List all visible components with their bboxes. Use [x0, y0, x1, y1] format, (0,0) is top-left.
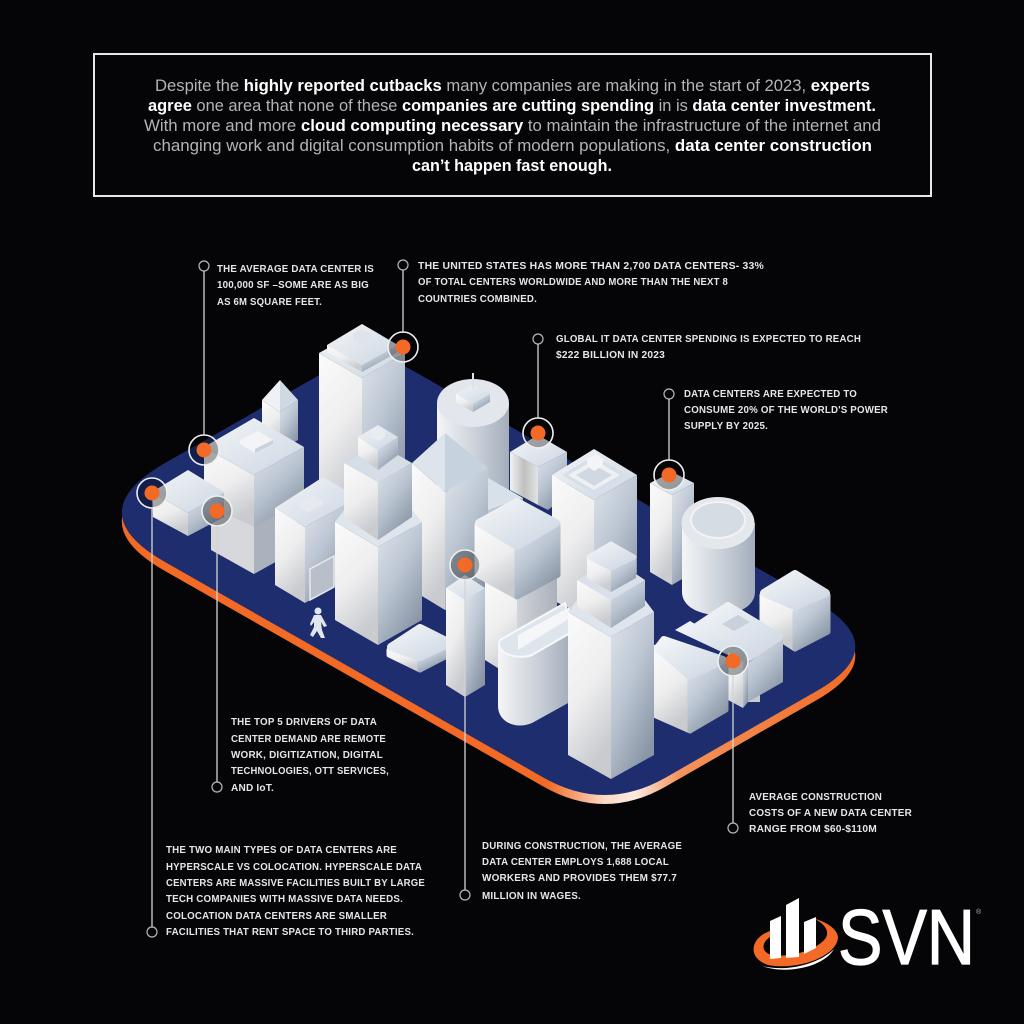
- platform orange edge: [122, 367, 855, 804]
- logo wordmark: SVN: [838, 893, 975, 981]
- callout: construction costs: COSTS OF A NEW DATA CENTER: [749, 808, 912, 819]
- callout: top 5 drivers: AND IoT.: [231, 783, 274, 794]
- callout: top 5 drivers: TECHNOLOGIES, OTT SERVICES,: [231, 766, 389, 777]
- callout: global spending: [556, 334, 861, 361]
- callout: construction jobs: DURING CONSTRUCTION, THE AVERAGE: [482, 841, 682, 852]
- callout: average size: 100,000 SF –SOME ARE AS BIG: [217, 280, 369, 291]
- intro text panel: [94, 54, 931, 196]
- callout: united states: [418, 261, 764, 305]
- callout: average size: AS 6M SQUARE FEET.: [217, 297, 322, 308]
- platform navy surface: [122, 358, 855, 795]
- building: slim front tower: [446, 575, 485, 697]
- callout: united states: THE UNITED STATES HAS MORE THAN 2,700 DATA CENTERS- 33%: [418, 261, 764, 272]
- intro text panel: can’t happen fast enough.: [412, 157, 612, 175]
- logo swoosh: [754, 919, 838, 966]
- building: stepped right tower: [552, 449, 637, 620]
- platform base: [122, 358, 855, 804]
- intro text panel: With more and more cloud computing necessary to maintain the infrastructure of the internet and: [144, 117, 881, 135]
- building: metal box: [510, 435, 567, 510]
- callout: top 5 drivers: WORK, DIGITIZATION, DIGITAL: [231, 750, 383, 761]
- marker: average size: [189, 261, 219, 465]
- pedestrian: [310, 608, 327, 638]
- callout: average size: THE AVERAGE DATA CENTER IS: [217, 264, 374, 275]
- building: tall back tower: [319, 324, 405, 510]
- intro text panel: agree one area that none of these companies are cutting spending in is data center investment.: [148, 97, 876, 115]
- logo bars: [770, 898, 816, 959]
- marker: united states: [388, 260, 418, 362]
- callout: power supply: CONSUME 20% OF THE WORLD'S POWER: [684, 405, 888, 416]
- callout: construction costs: AVERAGE CONSTRUCTION: [749, 792, 882, 803]
- callout: hyperscale types: THE TWO MAIN TYPES OF DATA CENTERS ARE: [166, 845, 397, 856]
- marker: global spending: [523, 334, 553, 448]
- callout: construction jobs: WORKERS AND PROVIDES THEM $77.7: [482, 873, 677, 884]
- building: rounded oblong: [498, 603, 572, 726]
- building: central stepped tower: [335, 425, 422, 645]
- callout: construction costs: RANGE FROM $60-$110M: [749, 824, 877, 835]
- building: mid left with door: [275, 477, 345, 603]
- callout: hyperscale types: [166, 845, 425, 938]
- building: rounded right cube: [762, 574, 828, 649]
- callout: power supply: [684, 389, 888, 432]
- leader lines and markers: [137, 260, 748, 937]
- building: small centre wedge: [488, 478, 523, 530]
- callout: top 5 drivers: [231, 717, 389, 794]
- marker: construction jobs: [450, 550, 480, 900]
- callout: hyperscale types: TECH COMPANIES WITH MASSIVE DATA NEEDS.: [166, 894, 403, 905]
- callout: hyperscale types: FACILITIES THAT RENT SPACE TO THIRD PARTIES.: [166, 927, 414, 938]
- building: slim right tower: [650, 472, 694, 585]
- callout: power supply: SUPPLY BY 2025.: [684, 421, 768, 432]
- callout: hyperscale types: COLOCATION DATA CENTERS ARE SMALLER: [166, 911, 387, 922]
- isometric city: [152, 324, 828, 779]
- building: pyramid roof block: [412, 433, 488, 610]
- intro text panel: changing work and digital consumption habits of modern populations, data center construction: [153, 137, 872, 155]
- callout: hyperscale types: CENTERS ARE MASSIVE FACILITIES BUILT BY LARGE: [166, 878, 425, 889]
- callout: global spending: $222 BILLION IN 2023: [556, 350, 665, 361]
- callout: hyperscale types: HYPERSCALE VS COLOCATION. HYPERSCALE DATA: [166, 862, 422, 873]
- callout: united states: OF TOTAL CENTERS WORLDWIDE AND MORE THAN THE NEXT 8: [418, 277, 728, 288]
- building: small spire: [262, 380, 298, 450]
- building: right cylinder: [682, 497, 755, 615]
- callout: construction costs: [749, 792, 912, 835]
- building: back cylinder: [437, 373, 509, 490]
- building: large left block: [204, 418, 304, 574]
- marker: top 5 drivers: [202, 496, 232, 792]
- callout: construction jobs: MILLION IN WAGES.: [482, 891, 581, 902]
- callout: global spending: GLOBAL IT DATA CENTER SPENDING IS EXPECTED TO REACH: [556, 334, 861, 345]
- SVN logo: [754, 893, 982, 981]
- marker: construction costs: [718, 646, 748, 833]
- registered mark: ®: [976, 908, 982, 916]
- intro text panel: Despite the highly reported cutbacks many companies are making in the start of 2023, experts: [155, 77, 870, 95]
- callout: top 5 drivers: THE TOP 5 DRIVERS OF DATA: [231, 717, 377, 728]
- callout: power supply: DATA CENTERS ARE EXPECTED TO: [684, 389, 857, 400]
- building: small left block: [152, 470, 224, 536]
- callout: construction jobs: [482, 841, 682, 902]
- marker: hyperscale types: [137, 478, 167, 937]
- building: tall white block: [477, 502, 558, 680]
- callout: top 5 drivers: CENTER DEMAND ARE REMOTE: [231, 734, 386, 745]
- callout: united states: COUNTRIES COMBINED.: [418, 294, 537, 305]
- building: front right complex: [656, 606, 783, 731]
- building: tall front tower: [568, 544, 654, 779]
- marker: power supply: [654, 389, 684, 490]
- callout: average size: [217, 264, 374, 308]
- building: low flat tile: [389, 628, 450, 670]
- callout: construction jobs: DATA CENTER EMPLOYS 1,688 LOCAL: [482, 857, 669, 868]
